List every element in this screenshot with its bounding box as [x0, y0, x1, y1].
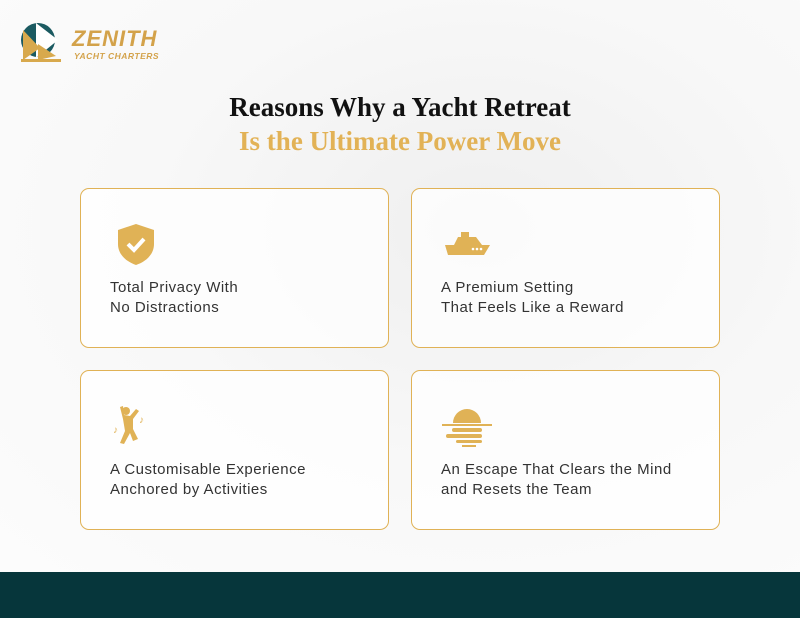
logo	[21, 23, 159, 62]
text	[110, 279, 238, 316]
panel: premium	[411, 188, 720, 348]
logo: YACHT CHARTERS	[74, 51, 159, 61]
icon: sunset	[442, 409, 492, 447]
icon: dancer: ♪	[113, 425, 118, 436]
icon: yacht	[445, 232, 490, 255]
panel: customisable	[80, 370, 389, 530]
icon: shield	[118, 224, 154, 265]
text: Total Privacy With	[110, 279, 238, 296]
text: A Customisable Experience	[110, 461, 306, 478]
footer band	[0, 572, 800, 618]
text: No Distractions	[110, 299, 219, 316]
text	[110, 461, 306, 498]
text	[441, 461, 672, 498]
text	[441, 279, 624, 316]
panel: privacy	[80, 188, 389, 348]
text: Anchored by Activities	[110, 481, 268, 498]
text: An Escape That Clears the Mind	[441, 461, 672, 478]
logo: ZENITH	[72, 26, 157, 51]
text: A Premium Setting	[441, 279, 574, 296]
icon: dancer	[113, 406, 144, 444]
title: Reasons Why a Yacht Retreat	[229, 92, 571, 122]
icon: dancer: ♪	[139, 415, 144, 426]
text: and Resets the Team	[441, 481, 592, 498]
text: That Feels Like a Reward	[441, 299, 624, 316]
panel: escape	[411, 370, 720, 530]
subtitle: Is the Ultimate Power Move	[239, 126, 561, 156]
